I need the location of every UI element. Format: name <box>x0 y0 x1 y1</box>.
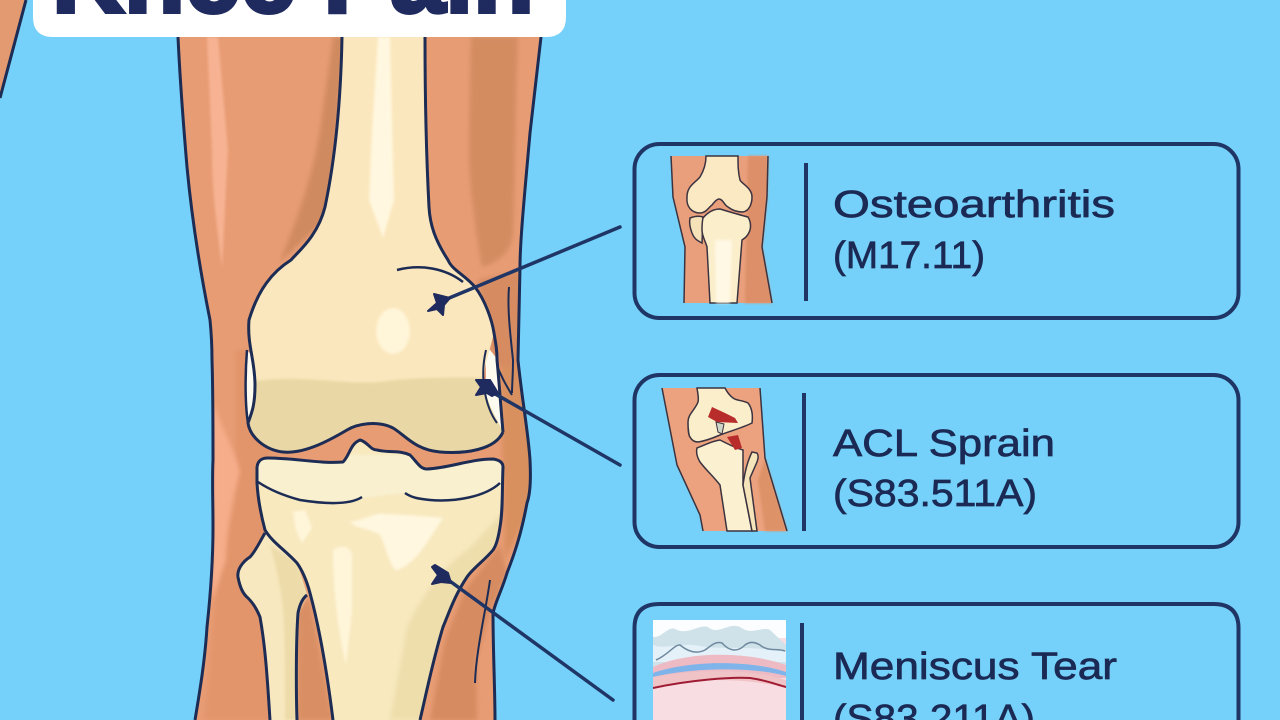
leg skin and muscle <box>178 30 543 720</box>
arrow to osteoarthritis <box>428 227 620 315</box>
diagnosis code: (S83.511A) <box>833 473 1037 515</box>
card: ACL sprain <box>634 375 1238 547</box>
condition name: Meniscus Tear <box>833 646 1117 688</box>
thumbnail: torn ligament knee <box>662 388 787 531</box>
card: osteoarthritis <box>634 144 1238 318</box>
arrow to meniscus tear <box>432 565 613 700</box>
condition name: Osteoarthritis <box>833 184 1115 226</box>
femur bone <box>240 37 510 470</box>
condition name: ACL Sprain <box>833 423 1055 465</box>
fibula bone <box>238 533 307 720</box>
adjacent leg fragment at top left <box>0 0 26 98</box>
divider <box>800 623 804 720</box>
card: meniscus tear <box>634 604 1238 720</box>
tibia bone <box>250 440 510 720</box>
thumbnail: meniscus cross-section <box>653 620 786 720</box>
arrow to ACL sprain <box>476 380 620 465</box>
meniscus <box>250 455 510 502</box>
divider <box>804 163 808 301</box>
title banner <box>33 0 566 37</box>
diagnosis code: (M17.11) <box>833 235 985 277</box>
muscle detail lines <box>475 287 513 683</box>
knee anatomy illustration <box>178 30 543 720</box>
leg outlines <box>178 37 213 720</box>
joint crescents <box>246 345 503 430</box>
divider <box>802 393 806 531</box>
thumbnail: healthy knee <box>671 156 772 303</box>
ligament tear <box>708 407 738 423</box>
